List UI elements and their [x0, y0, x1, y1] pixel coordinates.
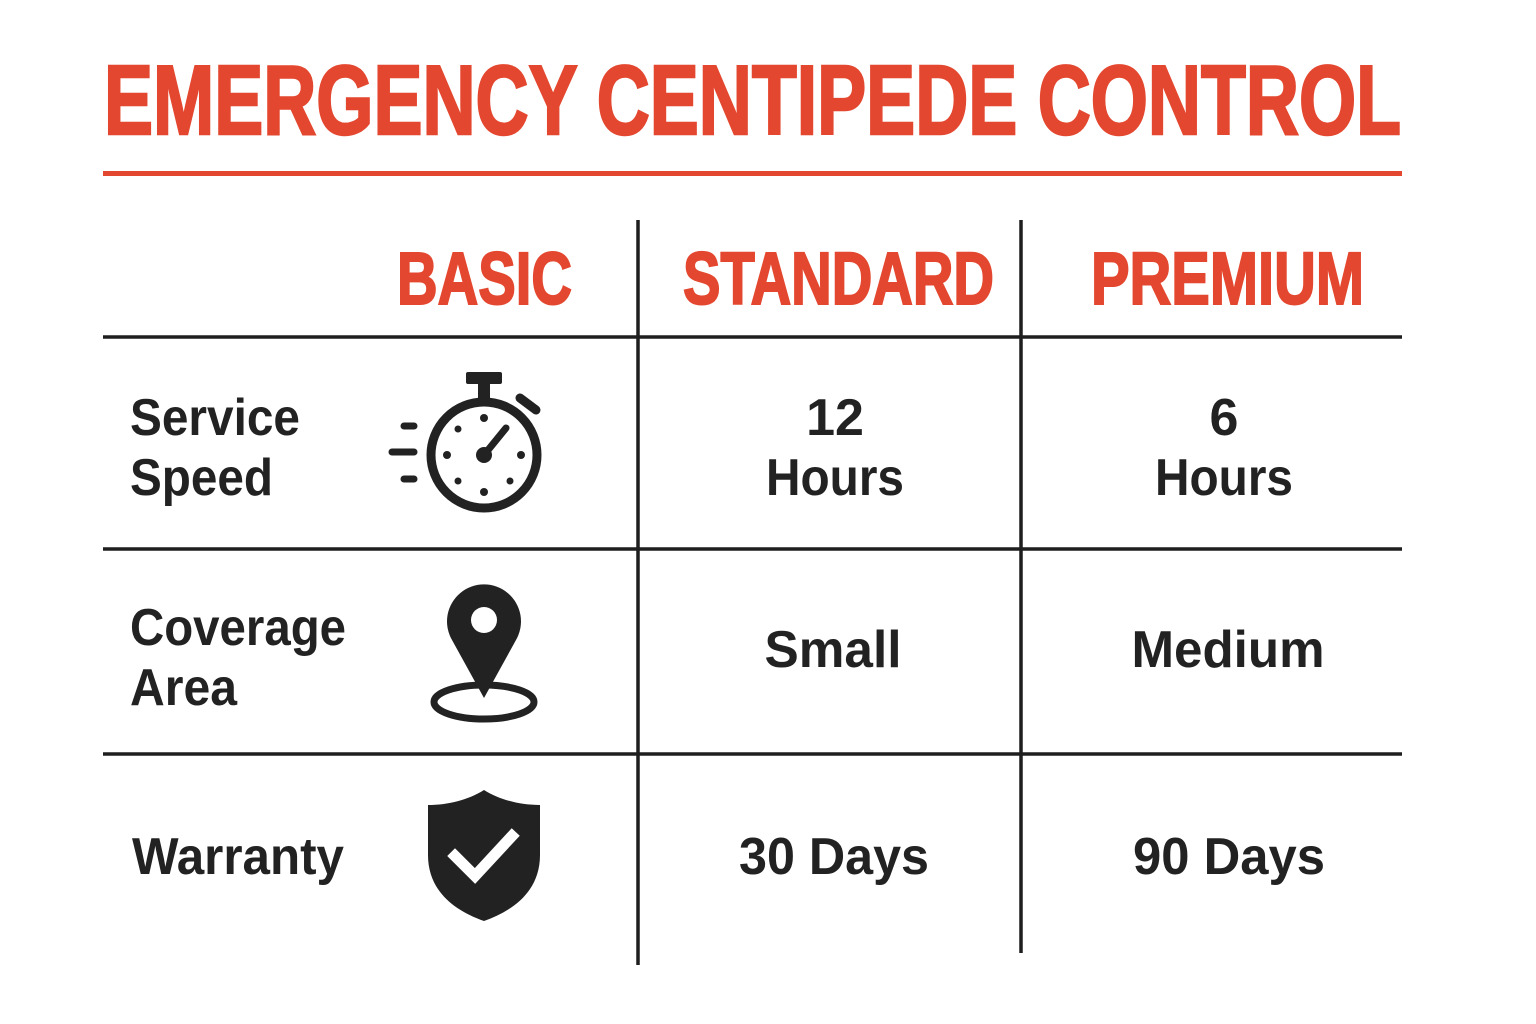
row: coverage area: Medium: [1132, 621, 1324, 679]
row: service speed: Speed: [130, 449, 273, 507]
column headers: STANDARD: [683, 237, 994, 320]
row: service speed: 6: [1210, 389, 1238, 447]
row: service speed: [130, 389, 1293, 507]
row: coverage area: Small: [764, 621, 902, 679]
row: coverage area: Coverage: [130, 599, 346, 657]
row: service speed: Hours: [766, 449, 904, 507]
row: warranty: 30 Days: [739, 828, 929, 886]
row: coverage area: Area: [130, 659, 238, 717]
icon: stopwatch: [392, 372, 537, 508]
column headers: PREMIUM: [1091, 237, 1364, 320]
column headers: [397, 237, 1364, 320]
row: service speed: Service: [130, 389, 300, 447]
row: warranty: 90 Days: [1133, 828, 1325, 886]
row: coverage area: [130, 599, 1324, 717]
icon: shield check: [428, 790, 540, 921]
row: warranty: [132, 828, 1325, 886]
row: service speed: 12: [806, 389, 864, 447]
column headers: BASIC: [397, 237, 572, 320]
icon: location pin: [434, 584, 534, 719]
row: service speed: Hours: [1155, 449, 1293, 507]
row: warranty: Warranty: [132, 828, 344, 886]
